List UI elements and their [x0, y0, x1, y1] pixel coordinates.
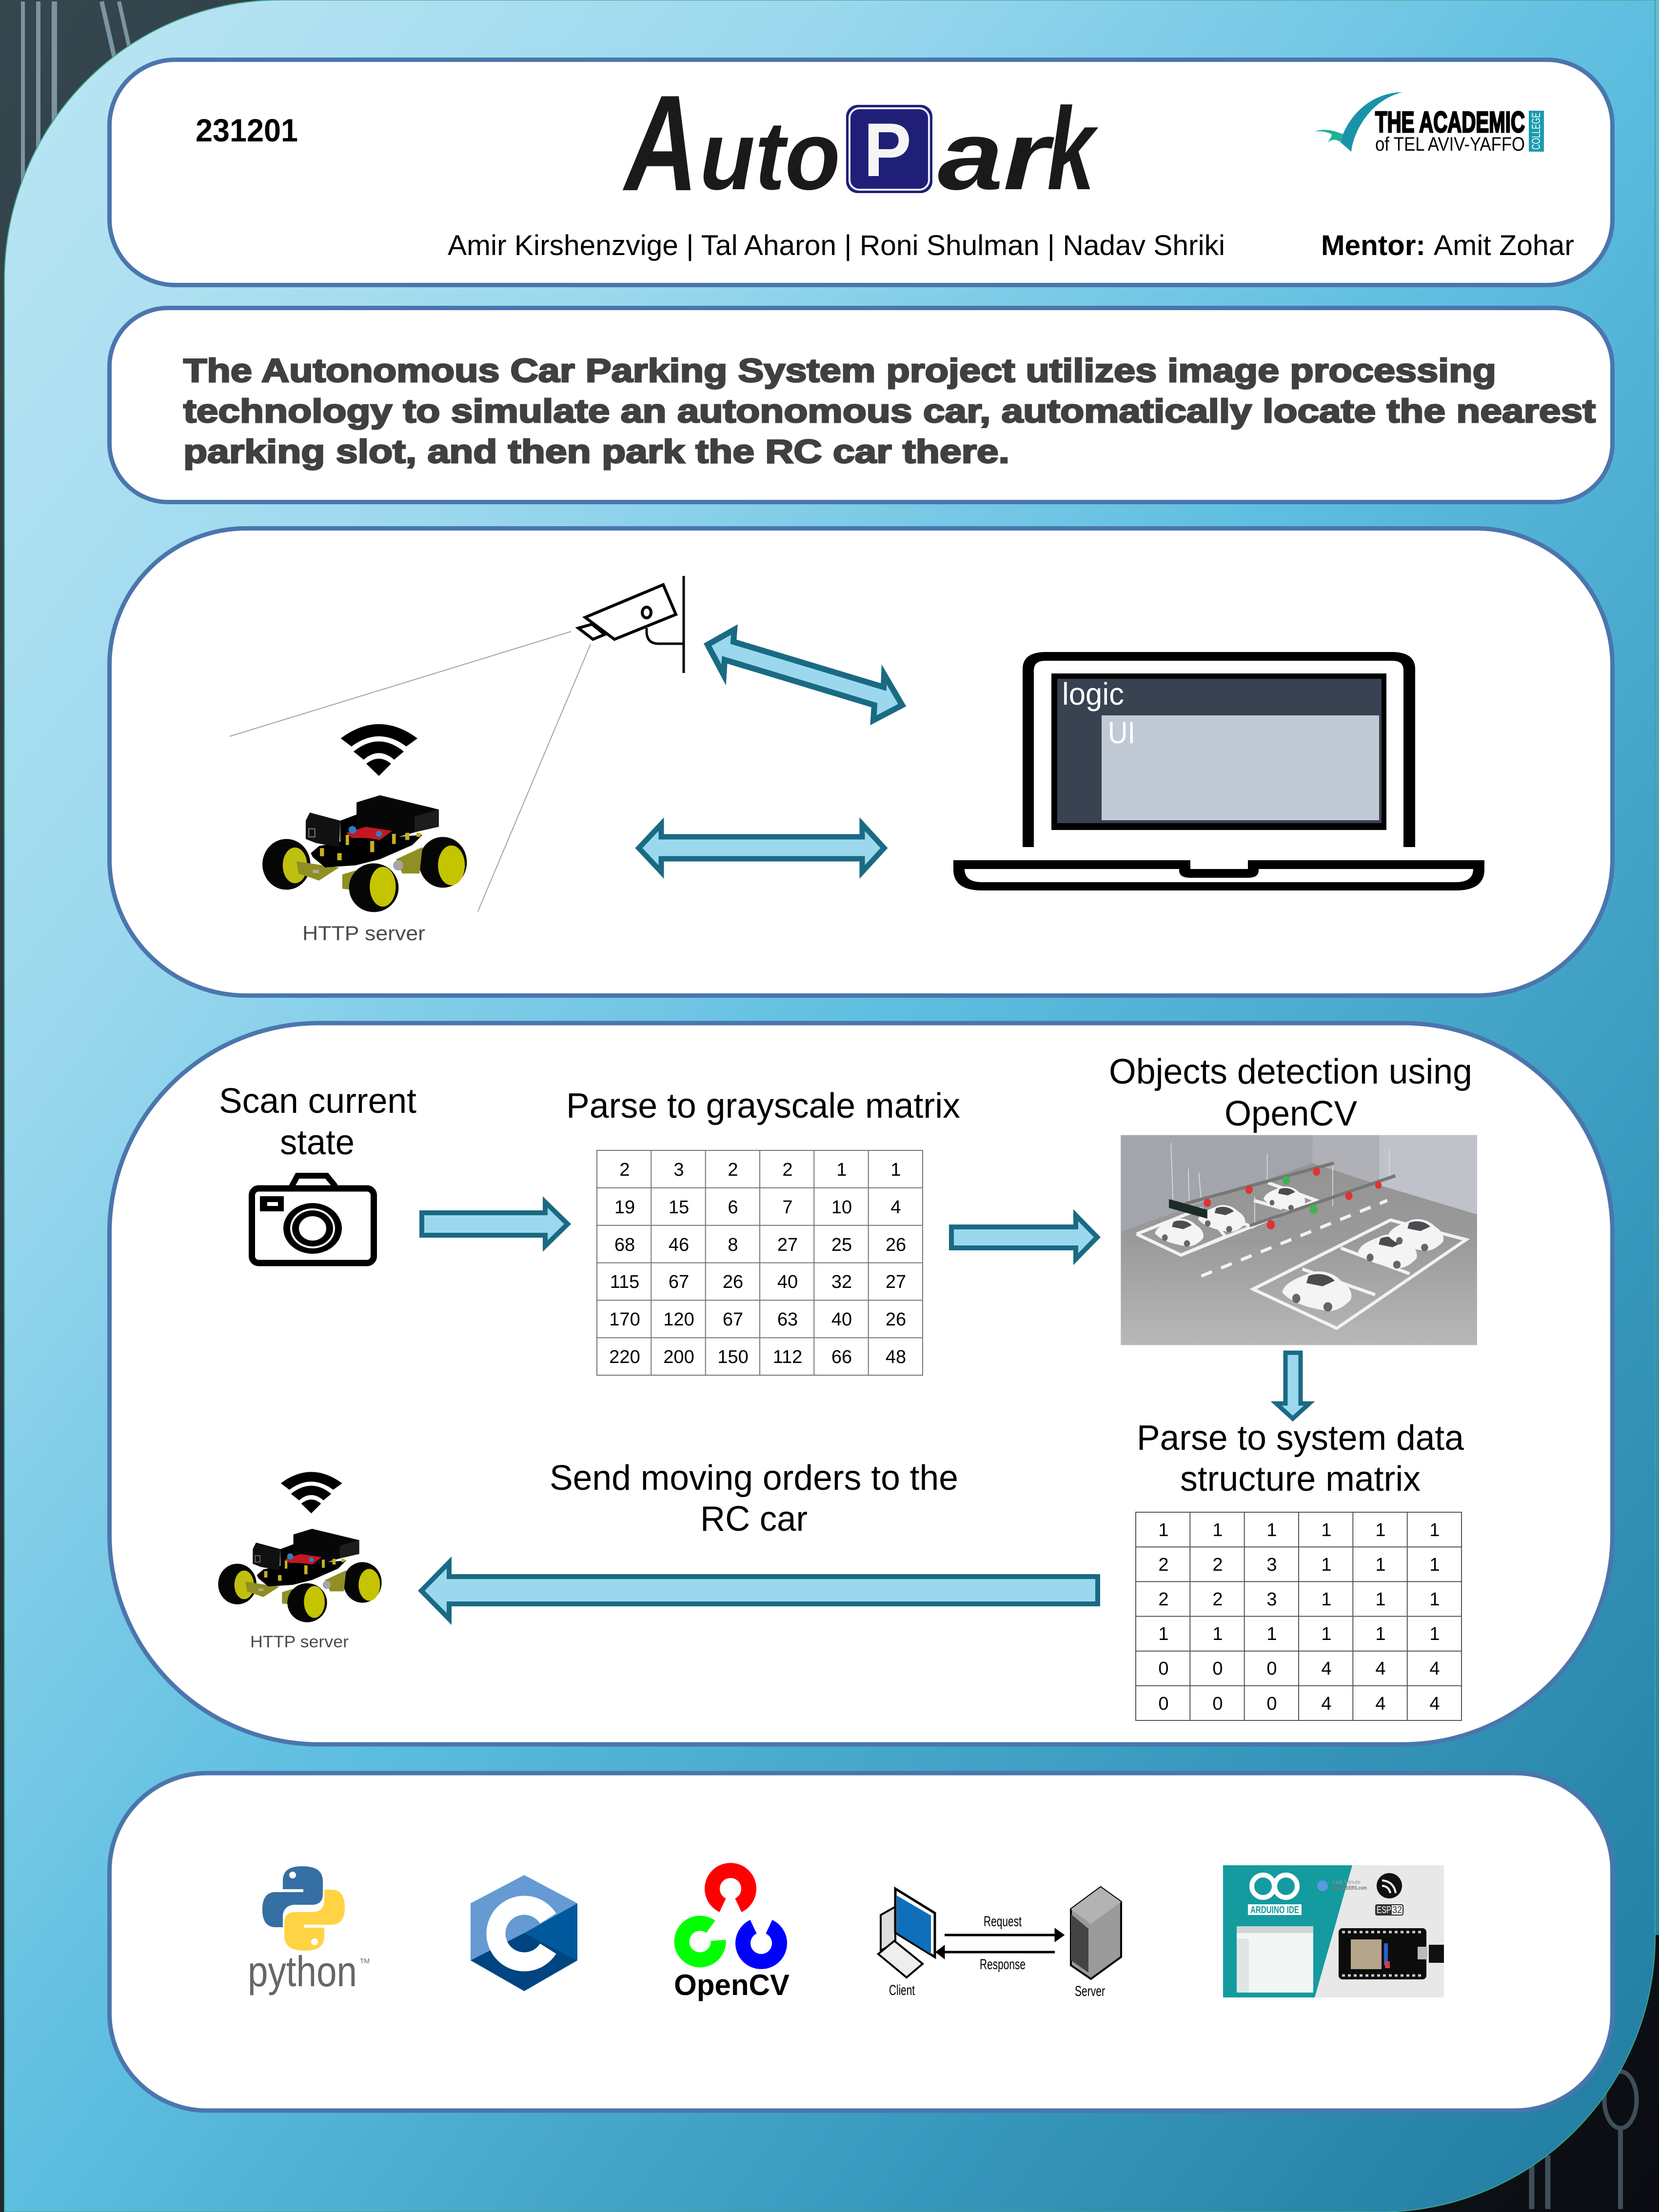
heading: objects detection: Objects detection using	[1109, 1052, 1472, 1091]
logo: Academic College of Tel Aviv-Yaffo	[1315, 92, 1544, 155]
image: Arduino IDE and ESP32: ESP	[1377, 1905, 1391, 1916]
image: parking lot scene	[1121, 1135, 1477, 1345]
table: system data structure matrix: 1	[1429, 1555, 1440, 1575]
table: grayscale matrix: 10	[831, 1197, 852, 1218]
description text: technology to simulate an autonomous car, automatically locate the nearest	[183, 393, 1596, 430]
caption: HTTP server: HTTP server	[302, 922, 425, 945]
table: system data structure matrix: 0	[1158, 1694, 1169, 1714]
table: system data structure matrix: 0	[1212, 1659, 1223, 1679]
table: grayscale matrix: 8	[728, 1235, 738, 1255]
title: AutoPark: k	[1047, 83, 1099, 214]
table: grayscale matrix: 220	[609, 1347, 640, 1367]
table: grayscale matrix: 1	[836, 1160, 847, 1180]
table: grayscale matrix: 170	[609, 1309, 640, 1330]
table: system data structure matrix: 1	[1321, 1589, 1332, 1610]
image: Arduino IDE and ESP32	[1223, 1865, 1444, 1997]
icon: camera	[252, 1176, 374, 1263]
arrow: car to laptop	[639, 824, 884, 872]
table: system data structure matrix: 1	[1429, 1624, 1440, 1644]
table: grayscale matrix: 2	[619, 1160, 630, 1180]
table: system data structure matrix: 2	[1212, 1589, 1223, 1610]
table: system data structure matrix: 4	[1375, 1659, 1386, 1679]
title: AutoPark: ar	[938, 101, 1054, 210]
icon: RC car with wifi	[218, 1472, 382, 1622]
table: system data structure matrix: 1	[1429, 1520, 1440, 1540]
table: grayscale matrix: 26	[886, 1235, 906, 1255]
title: AutoPark: P	[864, 108, 911, 193]
heading: system data structure matrix: structure matrix	[1180, 1460, 1421, 1499]
arrow: data structure to RC car	[421, 1562, 1098, 1619]
heading: grayscale matrix: Parse to grayscale matrix	[566, 1086, 960, 1126]
mentor	[1321, 230, 1574, 261]
heading: system data structure matrix: Parse to system data	[1137, 1419, 1464, 1458]
description text: The Autonomous Car Parking System project utilizes image processing	[183, 352, 1496, 389]
table: system data structure matrix: 0	[1266, 1694, 1277, 1714]
table: system data structure matrix: 2	[1158, 1555, 1169, 1575]
table: system data structure matrix: 0	[1266, 1659, 1277, 1679]
diagram: client server	[878, 1887, 1121, 1999]
heading: send moving orders: RC car	[700, 1500, 808, 1539]
logo: C language	[471, 1875, 577, 1991]
panel: processing flow	[109, 1023, 1612, 1746]
description text	[183, 352, 1596, 470]
table: system data structure matrix: 1	[1266, 1624, 1277, 1644]
heading: scan current state: Scan current	[219, 1082, 416, 1121]
table: grayscale matrix: 66	[831, 1347, 852, 1367]
diagram: client server: Response	[980, 1956, 1026, 1973]
table: grayscale matrix: 3	[673, 1160, 684, 1180]
table: grayscale matrix	[597, 1150, 923, 1375]
mentor: Mentor:	[1321, 230, 1425, 261]
diagram: client server: Request	[984, 1914, 1022, 1930]
table: system data structure matrix: 1	[1429, 1589, 1440, 1610]
logo: python: python	[248, 1947, 357, 1995]
diagram: client server: Server	[1075, 1983, 1105, 1999]
table: grayscale matrix: 112	[773, 1347, 802, 1367]
logo: Academic College of Tel Aviv-Yaffo: COLLEGE	[1530, 113, 1543, 150]
panel: system architecture	[109, 529, 1612, 997]
logo: python	[248, 1866, 370, 1995]
table: system data structure matrix: 4	[1429, 1659, 1440, 1679]
table: grayscale matrix: 67	[723, 1309, 743, 1330]
table: grayscale matrix: 200	[663, 1347, 694, 1367]
table: system data structure matrix: 3	[1266, 1555, 1277, 1575]
table: grayscale matrix: 26	[886, 1309, 906, 1330]
table: grayscale matrix: 40	[777, 1272, 798, 1292]
table: system data structure matrix	[1136, 1512, 1462, 1720]
logo: OpenCV: OpenCV	[674, 1969, 790, 2001]
table: system data structure matrix: 4	[1375, 1694, 1386, 1714]
logo: Academic College of Tel Aviv-Yaffo: of TEL AVIV-YAFFO	[1375, 134, 1525, 155]
title: AutoPark	[622, 67, 1099, 219]
image: Arduino IDE and ESP32: ARDUINO IDE	[1250, 1905, 1299, 1916]
table: system data structure matrix: 4	[1429, 1694, 1440, 1714]
table: system data structure matrix: 0	[1212, 1694, 1223, 1714]
table: system data structure matrix: 1	[1321, 1520, 1332, 1540]
table: system data structure matrix: 1	[1158, 1624, 1169, 1644]
table: system data structure matrix: 1	[1321, 1624, 1332, 1644]
table: grayscale matrix: 150	[717, 1347, 749, 1367]
title: AutoPark: A	[622, 67, 698, 219]
table: system data structure matrix: 1	[1375, 1555, 1386, 1575]
panel: header	[109, 59, 1612, 287]
icon: laptop with logic and UI: logic	[1062, 676, 1124, 711]
table: grayscale matrix: 7	[782, 1197, 793, 1218]
table: grayscale matrix: 4	[890, 1197, 901, 1218]
table: grayscale matrix: 67	[669, 1272, 689, 1292]
table: grayscale matrix: 25	[831, 1235, 852, 1255]
table: system data structure matrix: 1	[1321, 1555, 1332, 1575]
heading: scan current state	[219, 1082, 416, 1162]
table: grayscale matrix: 26	[723, 1272, 743, 1292]
heading: send moving orders	[550, 1459, 958, 1539]
table: system data structure matrix: 1	[1212, 1624, 1223, 1644]
panel: project description	[109, 308, 1612, 504]
table: grayscale matrix: 63	[777, 1309, 798, 1330]
icon: laptop with logic and UI: UI	[1108, 716, 1135, 750]
mentor: Amit Zohar	[1434, 230, 1574, 261]
table: system data structure matrix: 1	[1375, 1589, 1386, 1610]
diagram: client server: Client	[889, 1982, 915, 1998]
logo: Academic College of Tel Aviv-Yaffo: THE ACADEMIC	[1375, 106, 1525, 138]
heading: objects detection	[1109, 1052, 1472, 1133]
table: grayscale matrix: 6	[728, 1197, 738, 1218]
table: grayscale matrix: 120	[663, 1309, 694, 1330]
table: system data structure matrix: 2	[1212, 1555, 1223, 1575]
description text: parking slot, and then park the RC car there.	[183, 433, 1009, 470]
logo: python: TM	[360, 1957, 370, 1965]
table: grayscale matrix: 46	[669, 1235, 689, 1255]
image: Arduino IDE and ESP32: ENGINEERS.com	[1333, 1885, 1367, 1891]
table: grayscale matrix: 48	[886, 1347, 906, 1367]
table: grayscale matrix: 115	[610, 1272, 639, 1292]
logo: OpenCV	[674, 1871, 790, 2001]
icon: security camera	[578, 576, 684, 673]
panel: technologies	[109, 1773, 1612, 2113]
table: grayscale matrix: 2	[782, 1160, 793, 1180]
heading: send moving orders: Send moving orders to the	[550, 1459, 958, 1498]
table: grayscale matrix: 19	[614, 1197, 635, 1218]
image: Arduino IDE and ESP32: 32	[1392, 1905, 1402, 1916]
icon: laptop with logic and UI	[953, 652, 1484, 890]
project number: 231201	[196, 112, 298, 148]
table: system data structure matrix: 1	[1375, 1624, 1386, 1644]
team members: Amir Kirshenzvige | Tal Aharon | Roni Shulman | Nadav Shriki	[448, 230, 1225, 261]
icon: RC car with wifi	[262, 724, 467, 912]
table: grayscale matrix: 27	[777, 1235, 798, 1255]
table: system data structure matrix: 3	[1266, 1589, 1277, 1610]
table: system data structure matrix: 1	[1212, 1520, 1223, 1540]
table: grayscale matrix: 27	[886, 1272, 906, 1292]
arrow: detection to data structure	[1276, 1353, 1309, 1419]
caption: HTTP server: HTTP server	[250, 1633, 349, 1651]
heading: objects detection: OpenCV	[1224, 1094, 1357, 1133]
heading: system data structure matrix	[1137, 1419, 1464, 1499]
title: AutoPark: uto	[700, 101, 840, 210]
table: grayscale matrix: 32	[831, 1272, 852, 1292]
table: grayscale matrix: 40	[831, 1309, 852, 1330]
heading: scan current state: state	[280, 1123, 355, 1162]
arrow: camera to laptop	[708, 630, 902, 720]
image: Arduino IDE and ESP32: Last Minute	[1333, 1879, 1361, 1885]
table: system data structure matrix: 1	[1375, 1520, 1386, 1540]
table: grayscale matrix: 68	[614, 1235, 635, 1255]
table: system data structure matrix: 4	[1321, 1659, 1332, 1679]
table: system data structure matrix: 1	[1266, 1520, 1277, 1540]
table: system data structure matrix: 0	[1158, 1659, 1169, 1679]
camera field of view lines	[230, 632, 591, 911]
table: grayscale matrix: 2	[728, 1160, 738, 1180]
table: system data structure matrix: 2	[1158, 1589, 1169, 1610]
table: system data structure matrix: 4	[1321, 1694, 1332, 1714]
arrow: scan to grayscale	[422, 1202, 568, 1246]
table: grayscale matrix: 1	[890, 1160, 901, 1180]
table: system data structure matrix: 1	[1158, 1520, 1169, 1540]
arrow: grayscale to detection	[951, 1215, 1097, 1259]
table: grayscale matrix: 15	[669, 1197, 689, 1218]
